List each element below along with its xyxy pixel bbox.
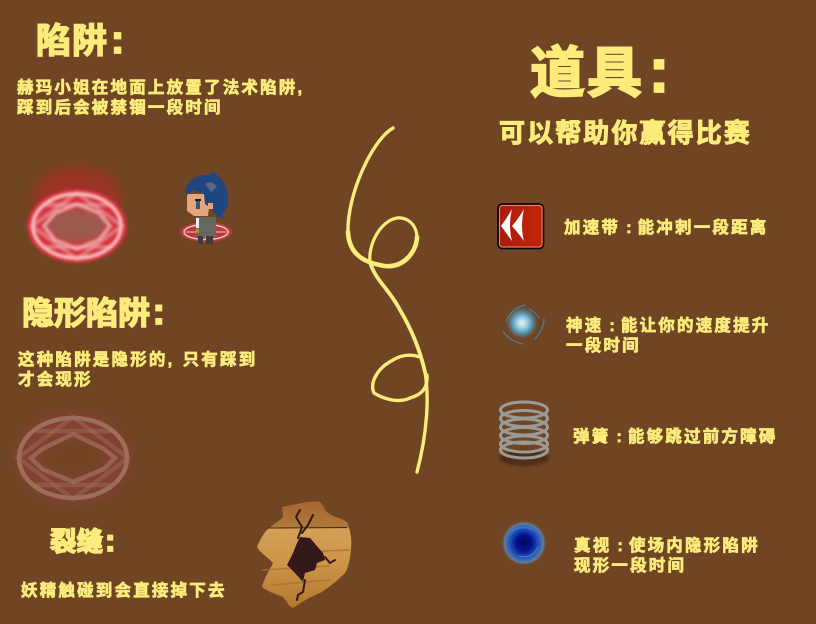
- text: true sight: 真视 使场内隐形陷阱: [574, 537, 760, 555]
- heading: traps: 陷阱: [36, 22, 108, 61]
- heading: invisible traps: :: [153, 291, 165, 332]
- heading: items: 道具: [530, 42, 644, 104]
- icon: red magic trap: [27, 167, 127, 263]
- text: haste: 神速 能让你的速度提升: [566, 317, 771, 335]
- text: invisible trap description: [18, 350, 257, 389]
- heading: crack: 裂缝: [50, 527, 103, 557]
- heading: crack: :: [105, 524, 115, 558]
- icon: haste swirl: [503, 305, 544, 344]
- text: invisible trap description: 才会现形: [18, 371, 93, 389]
- text: haste: [566, 316, 771, 355]
- icon: crack in wood: [257, 502, 351, 608]
- text: trap description: [16, 78, 302, 117]
- text: speed strip: :: [626, 219, 632, 237]
- text: speed strip: 加速带 能冲刺一段距离: [564, 219, 769, 237]
- text: spring: :: [616, 428, 622, 446]
- text: trap description: 踩到后会被禁锢一段时间: [17, 99, 223, 117]
- text: spring: 弹簧 能够跳过前方障碍: [573, 428, 778, 446]
- text: haste: :: [609, 317, 615, 335]
- text: crack description: 妖精触碰到会直接掉下去: [21, 582, 227, 600]
- heading: traps: [36, 17, 125, 62]
- text: trap description: 赫玛小姐在地面上放置了法术陷阱: [17, 79, 298, 97]
- text: items subtitle: 可以帮助你赢得比赛: [499, 118, 752, 148]
- text: invisible trap description: 这种陷阱是隐形的 只有踩到: [18, 351, 257, 369]
- text: trap description: ,: [298, 79, 302, 97]
- text: invisible trap description: ,: [168, 351, 172, 369]
- icon: true sight vortex: [501, 520, 547, 566]
- decorative squiggle: [348, 128, 427, 472]
- text: true sight: :: [617, 537, 623, 555]
- icon: spring: [499, 402, 549, 466]
- icon: character on trap: [180, 171, 232, 244]
- text: true sight: [574, 536, 760, 575]
- heading: traps: :: [111, 17, 125, 62]
- text: haste: 一段时间: [566, 337, 641, 355]
- text: true sight: 现形一段时间: [574, 557, 686, 575]
- icon: speed strip: [498, 204, 544, 248]
- heading: invisible traps: 隐形陷阱: [22, 295, 150, 331]
- heading: items: :: [648, 36, 672, 106]
- icon: faint invisible trap: [15, 412, 131, 504]
